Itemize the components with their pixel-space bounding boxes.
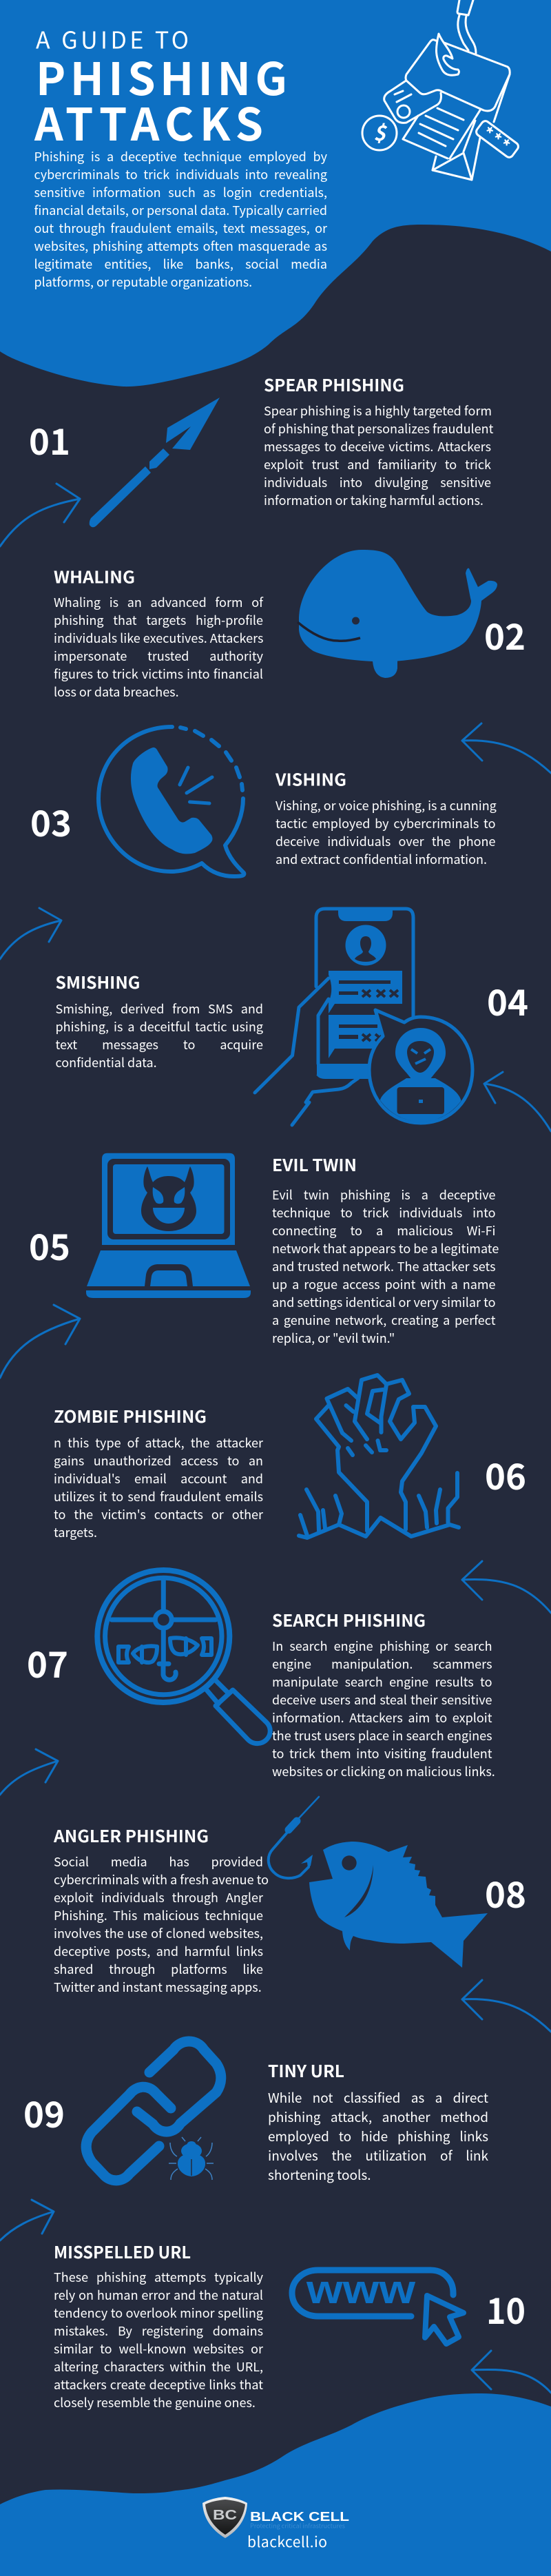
arrow 10 xyxy=(472,2351,551,2393)
number 09: 09 xyxy=(23,2086,65,2138)
body text: Smishing, derived from SMS and xyxy=(55,1000,263,1018)
heading: ZOMBIE PHISHING xyxy=(54,1403,207,1428)
icon: whale xyxy=(298,550,497,678)
heading: SEARCH PHISHING xyxy=(272,1607,426,1631)
icon: chain link xyxy=(86,2041,221,2181)
arrow 6 xyxy=(462,1561,551,1613)
icon: bug xyxy=(169,2137,214,2180)
body text xyxy=(276,796,497,868)
body text: mistakes. By registering domains xyxy=(54,2322,263,2340)
body text: confidential data. xyxy=(55,1053,157,1071)
number 02: 02 xyxy=(484,608,526,660)
body text: rely on human error and the natural xyxy=(54,2286,263,2304)
body text: individuals like executives. Attackers xyxy=(54,629,263,647)
body text: messages to deceive victims. Attackers xyxy=(264,437,491,455)
body text: connecting to a malicious Wi-Fi xyxy=(272,1222,496,1239)
body text: up a rogue access point with a name xyxy=(272,1275,496,1293)
arrow 4 xyxy=(484,1072,551,1131)
panel: zombie phishing xyxy=(54,1373,526,1541)
body text xyxy=(272,1637,495,1780)
body text: a genuine network, creating a perfect xyxy=(272,1311,496,1329)
intro text: out through fraudulent emails, text messages, or xyxy=(34,219,327,237)
brand name: BLACK CELL xyxy=(250,2510,349,2524)
body text: websites or clicking on malicious links. xyxy=(272,1762,495,1780)
body text: employed to hide phishing links xyxy=(268,2127,488,2145)
body text: phishing that targets high-profile xyxy=(54,611,263,629)
icon: phone speech bubble xyxy=(98,727,244,876)
icon: zombie hand xyxy=(299,1375,459,1538)
body text: tendency to overlook minor spelling xyxy=(54,2304,263,2322)
number 07: 07 xyxy=(27,1636,68,1688)
panel: search phishing xyxy=(27,1567,495,1780)
body text: text messages to acquire xyxy=(55,1035,263,1053)
body text xyxy=(54,2268,263,2411)
heading: WHALING xyxy=(54,564,135,588)
icon: hooked envelope with card, document, coin and password xyxy=(361,0,519,181)
body text: shortening tools. xyxy=(268,2165,371,2184)
body text: information or taking harmful actions. xyxy=(264,491,484,509)
body text: n this type of attack, the attacker xyxy=(54,1433,263,1451)
body text: In search engine phishing or search xyxy=(272,1637,492,1655)
top blue wave xyxy=(0,0,551,387)
body text: altering characters within the URL, xyxy=(54,2358,263,2376)
body text: the trust users place in search engines xyxy=(272,1727,492,1744)
body text: to the victim's contacts or other xyxy=(54,1505,263,1523)
body text: targets. xyxy=(54,1523,97,1541)
number 10: 10 xyxy=(486,2283,526,2334)
body text xyxy=(272,1186,499,1347)
body text xyxy=(54,593,263,701)
body text xyxy=(264,402,493,509)
arrow 3 xyxy=(0,908,61,959)
body text: to trick them into visiting fraudulent xyxy=(272,1744,492,1762)
number 01: 01 xyxy=(29,413,70,465)
icon: angler fish xyxy=(309,1842,488,1968)
body text xyxy=(268,2088,488,2184)
body text: phishing attack, another method xyxy=(268,2108,488,2126)
body text: of phishing that personalizes fraudulent xyxy=(264,420,493,437)
heading: MISSPELLED URL xyxy=(54,2239,191,2263)
body text: and extract confidential information. xyxy=(276,850,487,868)
icon: magnifier over fishing line xyxy=(97,1570,270,1744)
intro text: websites, phishing attempts often masquerade as xyxy=(34,237,327,255)
panel: whaling xyxy=(54,550,526,701)
body text: Whaling is an advanced form of xyxy=(54,593,263,611)
body text: technique to trick individuals into xyxy=(272,1204,496,1222)
icon: www cursor xyxy=(292,2267,464,2344)
footer: logo and url xyxy=(202,2497,349,2552)
body text: cybercriminals with a fresh avenue to xyxy=(54,1871,269,1888)
arrow 9 xyxy=(0,2200,54,2240)
body text: tactic employed by cybercriminals to xyxy=(276,814,496,832)
body text: network that appears to be a legitimate xyxy=(272,1239,499,1257)
body text: phishing, is a deceitful tactic using xyxy=(55,1018,263,1035)
body text: deceive individuals over the phone xyxy=(276,832,496,850)
body text: loss or data breaches. xyxy=(54,683,179,701)
body text: replica, or "evil twin." xyxy=(272,1329,395,1347)
icon: fish hook xyxy=(269,1797,319,1878)
body text: exploit trust and familiarity to trick xyxy=(264,455,491,473)
arrow 2 xyxy=(462,723,551,773)
intro text: sensitive information such as login credentials, xyxy=(34,183,327,201)
heading: EVIL TWIN xyxy=(272,1152,357,1176)
arrow 5 xyxy=(0,1305,80,1378)
body text: Vishing, or voice phishing, is a cunning xyxy=(276,796,497,814)
panel: misspelled url xyxy=(54,2239,526,2411)
tagline: Protecting critical infrastructures xyxy=(250,2522,345,2530)
panel: spear phishing xyxy=(29,372,493,528)
body text: Phishing. This malicious technique xyxy=(54,1906,263,1924)
panel: evil twin xyxy=(29,1152,499,1347)
body text: information. Attackers aim to exploit xyxy=(272,1709,492,1727)
body text: impersonate trusted authority xyxy=(54,647,263,665)
intro text: platforms, or reputable organizations. xyxy=(34,273,252,291)
intro text xyxy=(34,147,327,291)
shield logo: BC xyxy=(213,2508,237,2523)
body text: individuals into divulging sensitive xyxy=(264,473,491,491)
body text: Social media has provided xyxy=(54,1853,263,1871)
password asterisks: *** xyxy=(478,120,517,158)
heading: SPEAR PHISHING xyxy=(264,372,404,396)
body text: exploit individuals through Angler xyxy=(54,1888,263,1906)
title line: a guide to: A GUIDE TO xyxy=(36,22,189,55)
body text: engine manipulation. scammers xyxy=(272,1655,492,1673)
panel: smishing xyxy=(55,907,528,1127)
heading: TINY URL xyxy=(268,2058,344,2082)
body text: deceptive posts, and harmful links xyxy=(54,1942,263,1960)
panel: vishing xyxy=(30,725,497,878)
body text xyxy=(54,1433,263,1541)
intro text: Phishing is a deceptive technique employed by xyxy=(34,147,327,165)
body text: deceive users and steal their sensitive xyxy=(272,1691,492,1709)
body text: involves the utilization of link xyxy=(268,2146,488,2165)
panel: tiny url xyxy=(23,2037,488,2185)
body text: and settings identical or very similar to xyxy=(272,1293,496,1311)
heading: ANGLER PHISHING xyxy=(53,1823,209,1847)
body text: attackers create deceptive links that xyxy=(54,2376,263,2393)
body text: figures to trick victims into financial xyxy=(54,665,263,683)
number 03: 03 xyxy=(30,795,72,847)
title line: phishing: PHISHING xyxy=(36,43,287,108)
title block xyxy=(34,22,287,152)
shield logo xyxy=(202,2497,247,2538)
bottom blue wave xyxy=(0,2393,551,2576)
body text: utilizes it to send fraudulent emails xyxy=(54,1487,263,1505)
dollar sign: $ xyxy=(373,116,388,147)
intro text: cybercriminals to trick individuals into revealing xyxy=(34,165,327,183)
body text: Evil twin phishing is a deceptive xyxy=(272,1186,496,1204)
icon: spear xyxy=(90,398,220,527)
arrow 1 xyxy=(0,484,80,546)
arrow 7 xyxy=(0,1749,58,1795)
body text: closely resemble the genuine ones. xyxy=(54,2393,256,2411)
body text: manipulate search engine results to xyxy=(272,1673,492,1691)
body text: Twitter and instant messaging apps. xyxy=(54,1978,262,1996)
heading: VISHING xyxy=(275,766,346,791)
body text: individual's email account and xyxy=(54,1469,263,1487)
icon: www cursor: www xyxy=(306,2267,416,2312)
body text: and trusted network. The attacker sets xyxy=(272,1257,496,1275)
website url: blackcell.io xyxy=(247,2531,327,2552)
intro text: legitimate entities, like banks, social media xyxy=(34,255,327,273)
heading: SMISHING xyxy=(55,969,141,993)
body text xyxy=(54,1853,269,1996)
number 06: 06 xyxy=(485,1448,526,1500)
intro text: financial details, or personal data. Typically carried xyxy=(34,201,327,219)
body text: While not classified as a direct xyxy=(268,2088,488,2107)
body text xyxy=(55,1000,263,1071)
body text: shared through platforms like xyxy=(54,1960,263,1978)
number 08: 08 xyxy=(485,1866,526,1918)
arrow 8 xyxy=(462,1980,551,2032)
panel: angler phishing xyxy=(53,1795,526,1996)
icon: laptop with devil xyxy=(86,1153,251,1298)
icon: phone with hacker xyxy=(255,909,472,1125)
number 04: 04 xyxy=(487,974,528,1026)
body text: similar to well-known websites or xyxy=(54,2340,263,2358)
body text: involves the use of cloned websites, xyxy=(54,1924,263,1942)
body text: These phishing attempts typically xyxy=(54,2268,263,2286)
number 05: 05 xyxy=(29,1219,70,1270)
body text: gains unauthorized access to an xyxy=(54,1451,263,1469)
body text: Spear phishing is a highly targeted form xyxy=(264,402,492,420)
